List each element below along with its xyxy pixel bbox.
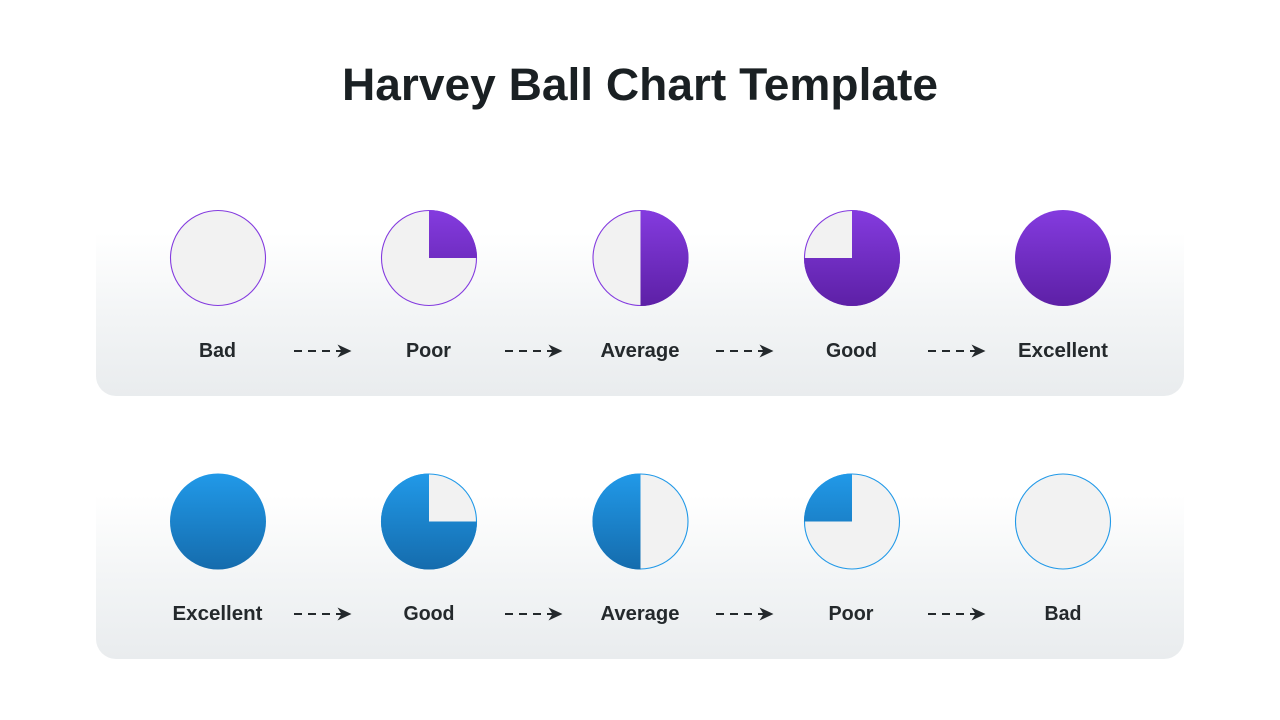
- panel: purple scale, bad to excellent: [96, 210, 1184, 396]
- label: excellent: Excellent: [172, 603, 263, 625]
- label: bad: Bad: [1044, 603, 1082, 625]
- arrow: [928, 344, 986, 358]
- harvey ball: good, three quarters: [804, 210, 900, 306]
- harvey ball: bad, empty: [170, 210, 266, 306]
- harvey ball: excellent, full: [1015, 210, 1111, 306]
- label: bad: Bad: [199, 340, 236, 362]
- panel: blue scale, excellent to bad: [96, 473, 1184, 659]
- label: excellent: Excellent: [1018, 340, 1108, 362]
- arrow: [505, 344, 562, 358]
- arrow: [716, 344, 774, 358]
- label: average: Average: [600, 340, 680, 362]
- title: Harvey Ball Chart Template: [342, 59, 938, 110]
- label: poor: Poor: [828, 603, 874, 625]
- harvey ball: average, half: [592, 474, 688, 570]
- arrow: [928, 608, 986, 620]
- label: good: Good: [404, 603, 454, 625]
- harvey ball: poor, quarter: [804, 474, 900, 569]
- harvey ball: bad, empty: [1016, 474, 1110, 569]
- panel background: [96, 473, 1184, 659]
- arrow: [505, 608, 562, 620]
- arrow: [294, 608, 352, 620]
- harvey ball: average, half: [593, 210, 688, 306]
- label: poor: Poor: [406, 340, 451, 362]
- label: average: Average: [600, 603, 680, 625]
- panel background: [96, 210, 1184, 396]
- arrow: [294, 344, 352, 358]
- harvey ball: excellent, full: [170, 474, 266, 570]
- label: good: Good: [826, 340, 877, 362]
- harvey ball: good, three quarters: [381, 474, 477, 570]
- arrow: [716, 608, 774, 620]
- harvey ball: poor, quarter: [382, 210, 477, 306]
